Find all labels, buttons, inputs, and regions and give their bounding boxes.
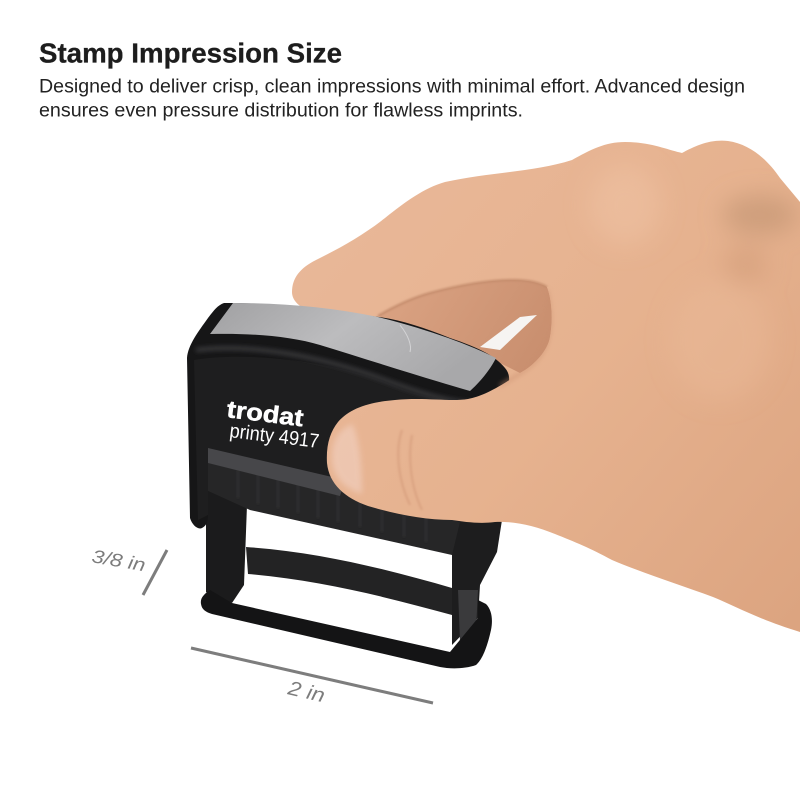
logo: trodat: trodat (225, 396, 305, 432)
stamp (187, 303, 509, 668)
index finger crease (378, 280, 547, 316)
window lower lip (196, 348, 482, 404)
skin tone patches (603, 178, 796, 272)
height dimension line (143, 550, 167, 595)
body shell (187, 303, 509, 528)
description text (39, 76, 745, 122)
ribbed band (206, 455, 460, 555)
white gap between fingers (480, 315, 537, 350)
description text: ensures even pressure distribution for flawless imprints. (39, 100, 523, 122)
dimension: 3/8 in (90, 545, 167, 595)
base frame (201, 590, 492, 668)
middle bar (246, 547, 452, 615)
window highlight (400, 325, 411, 352)
body shell lower face (194, 357, 480, 520)
thumb nail (332, 424, 362, 494)
width dimension line (191, 648, 433, 703)
left leg (206, 470, 247, 603)
right leg highlight (458, 590, 478, 642)
description text: Designed to deliver crisp, clean impressions with minimal effort. Advanced design (39, 76, 745, 98)
model: printy 4917: printy 4917 (228, 420, 320, 453)
thumb and palm (327, 165, 800, 632)
hand: fingers and back of hand (292, 141, 800, 500)
right leg (452, 520, 502, 645)
rib lines (238, 470, 426, 542)
top grey window (210, 303, 496, 391)
thumb creases (398, 430, 422, 510)
grey stripe (208, 448, 345, 496)
height label: 3/8 in (90, 545, 147, 575)
title: Stamp Impression Size (39, 38, 342, 68)
width label: 2 in (285, 677, 327, 707)
photo: hand holding stamp (187, 141, 800, 668)
palm-finger fold shading (500, 290, 550, 386)
infographic canvas (40, 42, 800, 704)
second finger behind stamp (378, 280, 552, 373)
dimension: 2 in (191, 648, 433, 707)
